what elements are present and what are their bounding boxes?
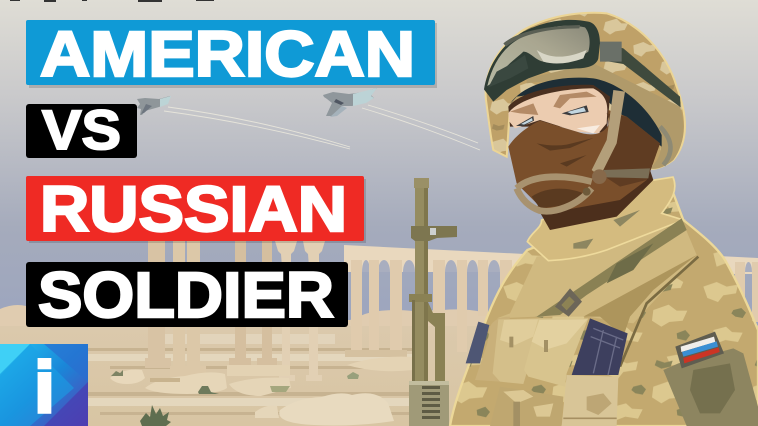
heading label: VS	[26, 98, 137, 161]
neck	[537, 160, 653, 230]
goggles frame	[484, 20, 600, 102]
chest magazine right	[572, 318, 628, 375]
logo: infographics i	[0, 344, 88, 426]
chest cloth	[497, 223, 697, 323]
right front pocket	[562, 375, 618, 426]
eyes	[516, 105, 589, 126]
top edge marks	[10, 0, 214, 2]
face skin	[508, 88, 607, 133]
ruins: distant colonnade	[145, 240, 335, 381]
helmet and head	[484, 13, 685, 230]
soldier	[450, 13, 758, 426]
russian flag patch	[675, 332, 724, 368]
face mask	[508, 110, 660, 213]
rifle	[409, 178, 457, 426]
heading label: VS: VS	[42, 98, 121, 161]
distant hills	[0, 305, 508, 332]
heading label: AMERICAN: AMERICAN	[40, 18, 415, 90]
desert ground	[0, 326, 758, 426]
sleeve seam	[620, 257, 698, 367]
contrail: right jet	[362, 105, 480, 150]
chest magazine left	[466, 322, 489, 363]
logo: infographics i: i	[35, 349, 54, 426]
helmet underside	[510, 78, 662, 147]
lower pouch	[490, 387, 563, 426]
goggles lens	[487, 26, 590, 86]
pouch: right	[524, 318, 588, 387]
goggle strap	[600, 42, 681, 107]
heading label: RUSSIAN: RUSSIAN	[40, 173, 347, 245]
soldier torso and jacket	[450, 177, 758, 426]
contrail: left jet	[164, 107, 350, 149]
sky background	[0, 0, 758, 325]
jet: right	[323, 88, 377, 117]
helmet shell	[486, 13, 685, 169]
heading label: SOLDIER: SOLDIER	[38, 259, 334, 331]
shoulder strap	[537, 218, 687, 317]
chin strap	[517, 177, 592, 211]
neck collar	[527, 177, 683, 261]
helmet rim	[527, 63, 683, 169]
grass tufts	[111, 370, 359, 426]
ruins: arcade with arches	[344, 245, 758, 357]
strap buckle	[555, 288, 582, 317]
jet: left	[137, 96, 171, 115]
sleeve pocket	[663, 348, 758, 426]
pouch: left small	[475, 317, 510, 382]
pouch: middle	[493, 318, 538, 384]
rocks and rubble	[110, 357, 413, 426]
